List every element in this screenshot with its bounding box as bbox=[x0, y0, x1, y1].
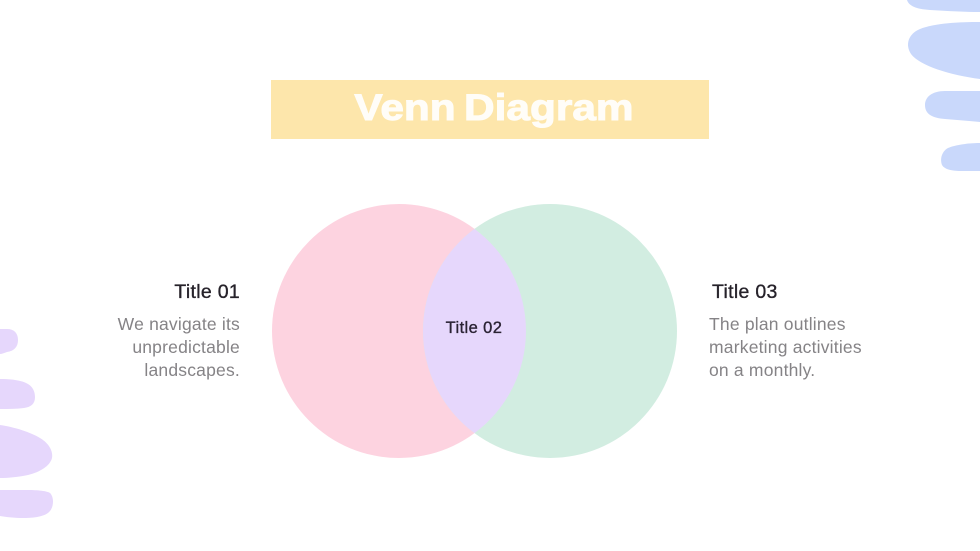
decorative blobs: bottom left bbox=[0, 329, 53, 518]
description: Title 03: on a monthly. bbox=[709, 360, 815, 380]
title banner bbox=[271, 80, 709, 139]
decorative blobs: top right bbox=[907, 0, 980, 171]
description: Title 01: We navigate its bbox=[118, 314, 240, 334]
venn diagram bbox=[272, 204, 677, 458]
heading: Title 03: Title 03 bbox=[712, 281, 778, 303]
description: Title 01: unpredictable bbox=[132, 337, 240, 357]
circle: Title 03 bbox=[423, 204, 677, 458]
description: Title 03 bbox=[709, 314, 862, 380]
text block: Title 01 bbox=[118, 281, 240, 380]
overlap: Title 02 bbox=[423, 229, 526, 433]
description: Title 01: landscapes. bbox=[144, 360, 240, 380]
description: Title 03: The plan outlines bbox=[709, 314, 846, 334]
heading: Title 01: Title 01 bbox=[174, 281, 240, 303]
title: Venn Diagram bbox=[354, 86, 634, 128]
description: Title 01 bbox=[118, 314, 240, 380]
circle: Title 01 bbox=[272, 204, 526, 458]
text block: Title 03 bbox=[709, 281, 862, 380]
description: Title 03: marketing activities bbox=[709, 337, 862, 357]
label: Title 02: Title 02 bbox=[446, 319, 502, 337]
